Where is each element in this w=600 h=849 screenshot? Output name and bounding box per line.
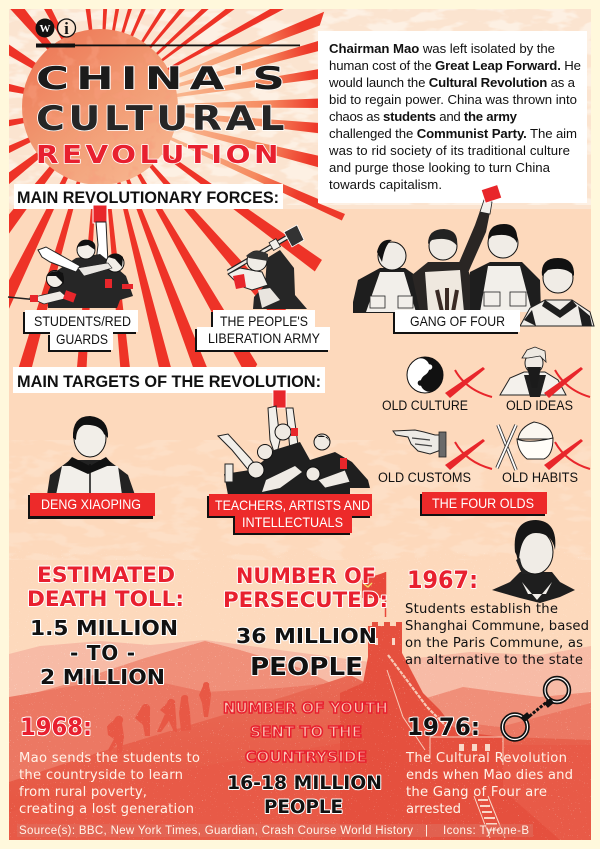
label: deng xiaoping: DENG XIAOPING — [41, 496, 141, 512]
stat: number of youth sent to the countryside: 16-18 MILLION — [227, 772, 382, 794]
label: the people's liberation army — [195, 310, 330, 352]
label: students/red guards: STUDENTS/RED — [34, 313, 131, 329]
label: teachers, artists and intellectuals — [207, 494, 372, 535]
event: 1976: ends when Mao dies and — [406, 768, 573, 783]
stat: estimated death toll: - TO - — [70, 641, 135, 665]
illustration: deng xiaoping — [47, 416, 135, 495]
label: gang of four: GANG OF FOUR — [410, 313, 505, 329]
event: 1968: 1968: — [20, 713, 92, 741]
caption: old culture: OLD CULTURE — [382, 398, 468, 413]
event: 1976: The Cultural Revolution — [405, 751, 567, 766]
icon: cross over old customs — [445, 439, 492, 470]
title: REVOLUTION — [36, 140, 282, 169]
heading: main targets of the revolution: MAIN TARGETS OF THE REVOLUTION: — [17, 372, 321, 391]
source credits: Icons: Tyrone-B — [443, 825, 529, 837]
illustration: people's liberation army soldier — [228, 225, 307, 309]
event: 1967: 1967: — [407, 566, 478, 594]
label: students/red guards — [23, 310, 138, 352]
title — [36, 61, 292, 169]
event: 1967: on the Paris Commune, as — [405, 636, 583, 651]
icon: old ideas sage — [500, 347, 566, 397]
label: the people's liberation army: THE PEOPLE'S — [220, 313, 308, 329]
event: 1976: arrested — [406, 802, 461, 817]
source bar backing — [17, 824, 533, 837]
event: 1967: Shanghai Commune, based — [405, 619, 589, 634]
source credits: | — [425, 825, 428, 837]
illustration: chairman mao portrait — [492, 520, 575, 603]
stat: number of persecuted: 36 MILLION — [236, 624, 377, 648]
intro text panel: would launch the Cultural Revolution as a — [328, 75, 576, 90]
stat: number of persecuted: PEOPLE — [250, 652, 363, 681]
event: 1976 — [405, 713, 573, 817]
mountains and Great Wall landscape — [9, 550, 591, 840]
event: 1968: the countryside to learn — [19, 768, 183, 783]
illustration: gang of four — [353, 185, 594, 326]
source credits: Source(s): BBC, New York Times, Guardian, Crash Course World History — [19, 825, 413, 837]
title rule — [36, 44, 300, 48]
event: 1967: Students establish the — [405, 602, 558, 617]
intro text panel: challenged the Communist Party. The aim — [329, 126, 577, 141]
Great Wall — [340, 572, 560, 840]
logo icons: W — [40, 23, 50, 35]
event: 1968 — [19, 713, 200, 817]
stat: number of persecuted — [223, 564, 388, 681]
stat: estimated death toll — [27, 563, 184, 689]
stat: estimated death toll: 2 MILLION — [40, 665, 165, 689]
intro text panel: and purge those looking to turn China — [329, 160, 551, 175]
caption: old customs: OLD CUSTOMS — [378, 470, 471, 485]
icon: old habits rice bowl and chopsticks — [497, 422, 553, 470]
icon: handcuffs — [502, 678, 569, 740]
event: 1968: from rural poverty, — [19, 785, 147, 800]
stat: estimated death toll: 1.5 MILLION — [30, 616, 178, 640]
stat: number of persecuted: PERSECUTED: — [223, 588, 388, 612]
title: CHINA'S — [36, 61, 292, 97]
intro text panel: chaos as students and the army — [329, 109, 518, 124]
label: gang of four — [393, 310, 520, 334]
stat: number of youth sent to the countryside: COUNTRYSIDE — [245, 748, 367, 766]
label: deng xiaoping — [28, 493, 155, 519]
label: the people's liberation army: LIBERATION ARMY — [208, 330, 321, 346]
poster panel background — [9, 9, 591, 662]
sun rays — [9, 9, 345, 367]
intro text panel: Chairman Mao was left isolated by the — [329, 41, 555, 56]
icon: cross over old habits — [544, 439, 590, 470]
event: 1976: the Gang of Four are — [406, 785, 547, 800]
intro text panel — [318, 31, 587, 203]
icon: cross over old culture — [445, 367, 492, 398]
logo icons: i — [64, 19, 69, 38]
stat: number of youth sent to the countryside: PEOPLE — [264, 796, 343, 818]
event: 1968: Mao sends the students to — [19, 751, 200, 766]
event: 1967: an alternative to the state — [405, 653, 583, 668]
intro text panel: was to rid society of its traditional culture — [328, 143, 570, 158]
speckle texture — [9, 550, 591, 840]
stat: estimated death toll: DEATH TOLL: — [27, 587, 184, 611]
label: the four olds: THE FOUR OLDS — [432, 495, 534, 511]
stat: number of persecuted: NUMBER OF — [236, 564, 376, 588]
marching silhouettes — [107, 682, 211, 753]
label: students/red guards: GUARDS — [56, 331, 108, 347]
stat: estimated death toll: ESTIMATED — [37, 563, 175, 587]
illustration: teachers, artists and intellectuals — [218, 390, 370, 495]
caption: old ideas: OLD IDEAS — [506, 398, 573, 413]
stat: number of youth sent to the countryside: SENT TO THE — [250, 723, 362, 741]
caption: old habits: OLD HABITS — [502, 470, 578, 485]
icon: old culture yin yang — [407, 350, 450, 395]
label: teachers, artists and intellectuals: TEACHERS, ARTISTS AND — [215, 497, 370, 513]
event: 1968: creating a lost generation — [19, 802, 194, 817]
intro text panel: human cost of the Great Leap Forward. He — [329, 58, 581, 73]
illustration: students and red guards — [8, 205, 133, 308]
icon: old customs pointing hand — [393, 430, 446, 457]
title: CULTURAL — [36, 99, 288, 139]
logo icons — [36, 18, 76, 38]
label: the four olds — [420, 492, 547, 516]
stat: number of youth sent to the countryside — [223, 699, 388, 818]
event: 1976: 1976: — [407, 713, 480, 741]
rising sun — [22, 29, 178, 185]
icon: cross over old ideas — [544, 367, 590, 398]
stat: number of youth sent to the countryside: NUMBER OF YOUTH — [223, 699, 388, 717]
label: teachers, artists and intellectuals: INTELLECTUALS — [242, 514, 343, 530]
heading: main revolutionary forces: MAIN REVOLUTIONARY FORCES: — [17, 188, 279, 207]
intro text panel: towards capitalism. — [329, 177, 442, 192]
event: 1967 — [405, 566, 589, 668]
intro text panel: bid to regain power. China was thrown into — [329, 92, 577, 107]
